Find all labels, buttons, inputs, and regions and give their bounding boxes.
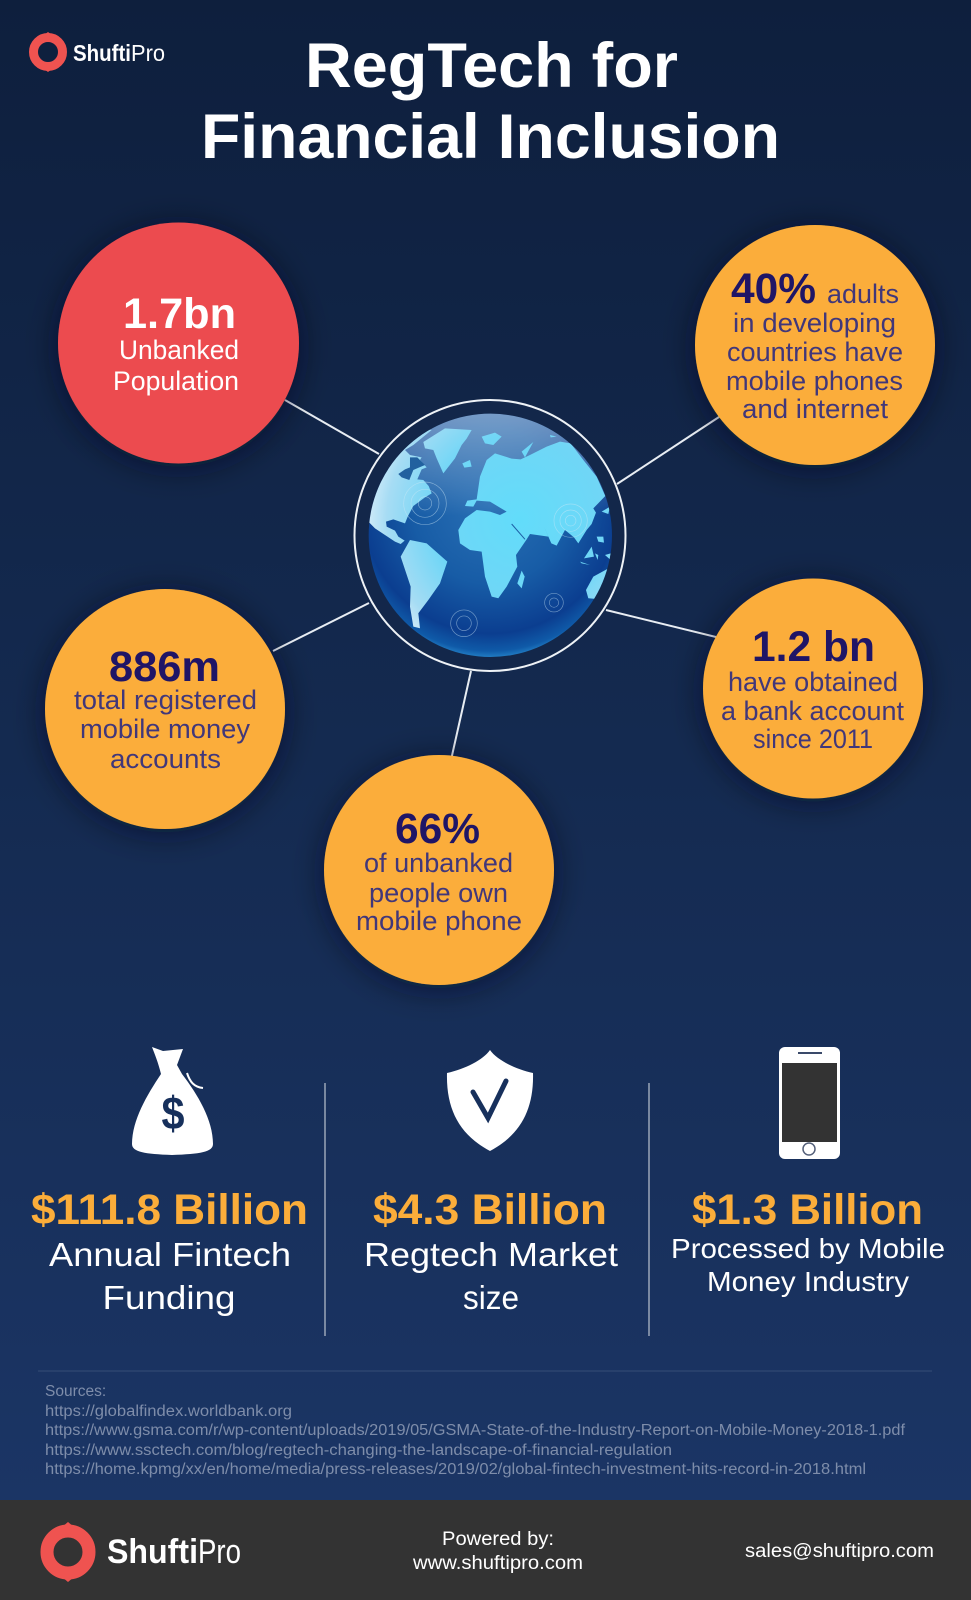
stat: 886m: 886m [109,643,220,691]
logo: ShuftiPro footer: Shufti [107,1533,198,1571]
stat: 1.2 bn [703,578,923,798]
sources: Sources: [45,1383,106,1400]
stat: 1.7bn unbanked population [58,222,299,464]
stat: 1.2 bn: since 2011 [753,724,873,754]
sources: https://www.ssctech.com/blog/regtech-changing-the-landscape-of-financial-regulation [45,1442,672,1459]
stat: 1.7bn unbanked population: Unbanked [119,335,239,365]
stat: 66%: 66% [395,805,480,853]
stat: annual fintech funding: Annual Fintech [49,1236,291,1273]
stat: mobile money industry: Money Industry [707,1266,909,1297]
stat: 1.7bn unbanked population: Population [113,366,239,396]
sources: https://home.kpmg/xx/en/home/media/press-releases/2019/02/global-fintech-investment-hits-record-in-2018.html [45,1461,866,1478]
stat: 66%: mobile phone [356,906,522,936]
stat: 1.2 bn: a bank account [721,696,904,726]
stat: 40% adults: adults [827,279,899,309]
stat: 40% adults: 40% [731,265,816,313]
stat: 1.7bn unbanked population: 1.7bn [123,290,236,338]
stat: 886m [45,589,285,829]
icon: mobile phone [779,1047,840,1159]
sources: https://www.gsma.com/r/wp-content/uploads/2019/05/GSMA-State-of-the-Industry-Report-on-Mobile-Money-2018-1.pdf [45,1422,906,1439]
stat: mobile money industry: $1.3 Billion [692,1186,923,1234]
stat: 40% adults: mobile phones [726,366,903,396]
title: Financial Inclusion [201,102,780,172]
logo: ShuftiPro footer: Pro [198,1533,241,1571]
stat: regtech market size [364,1186,618,1316]
stat: regtech market size: $4.3 Billion [373,1186,607,1234]
title [201,31,780,172]
sources [45,1383,906,1478]
title: RegTech for [305,31,678,101]
stat: mobile money industry: Processed by Mobile [671,1233,945,1264]
stat: annual fintech funding: Funding [102,1279,236,1316]
powered by [412,1529,583,1574]
stat: 1.2 bn: 1.2 bn [752,623,875,671]
stat: 66%: people own [369,878,508,908]
stat: 40% adults: countries have [727,337,903,367]
logo: ShuftiPro header: Shufti [73,40,131,66]
globe [354,400,626,671]
sources: https://globalfindex.worldbank.org [45,1403,292,1420]
powered by: www.shuftipro.com [412,1553,583,1574]
stat: mobile money industry [671,1186,945,1297]
stat: 886m: accounts [110,744,221,774]
stat: 40% adults [695,225,935,465]
divider [324,1083,326,1336]
stat: 1.2 bn: have obtained [728,667,898,697]
stat: 66%: of unbanked [364,848,513,878]
icon: money bag [132,1047,213,1155]
divider [648,1083,650,1336]
icon: shield [447,1050,533,1151]
footer bar [0,1500,971,1600]
stat: 886m: total registered [74,685,257,715]
logo: ShuftiPro header [34,32,165,72]
stat: 40% adults: and internet [742,394,889,424]
stat: annual fintech funding: $111.8 Billion [31,1186,308,1234]
seas drawn over land [398,457,425,480]
stat: 66% [324,755,554,985]
stat: regtech market size: Regtech Market [364,1236,618,1273]
stat: regtech market size: size [463,1279,519,1316]
stat: annual fintech funding [31,1186,308,1316]
logo: ShuftiPro footer [47,1522,241,1582]
connector lines [273,400,719,760]
logo: ShuftiPro header: Pro [131,40,165,66]
powered by: Powered by: [442,1529,554,1550]
stat: 40% adults: in developing [733,308,896,338]
contact email: sales@shuftipro.com [745,1541,934,1562]
stat: 886m: mobile money [80,714,251,744]
icon: money bag: $ [162,1087,184,1139]
